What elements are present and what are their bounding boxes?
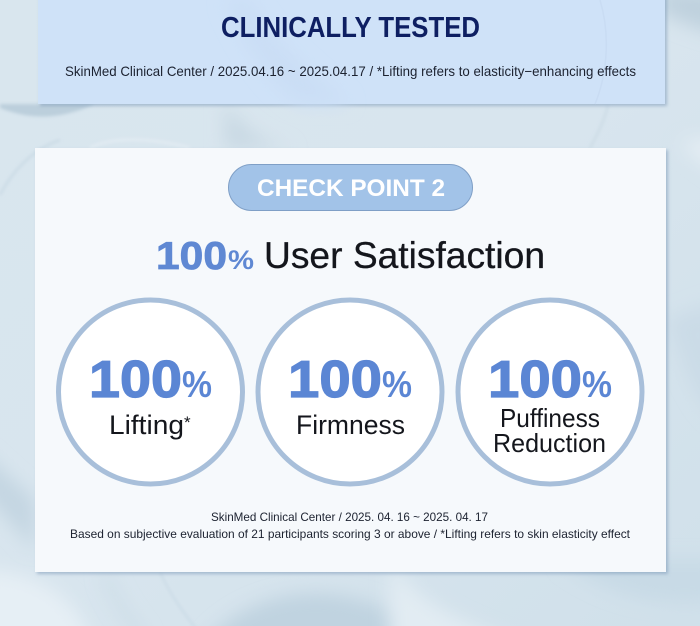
badge: check point 2 xyxy=(228,164,472,210)
badge: check point 2: CHECK POINT 2 xyxy=(257,175,445,202)
stat circle: lifting xyxy=(58,300,242,484)
stat circle: puffiness reduction: % xyxy=(582,364,612,405)
stat circle: firmness: Firmness xyxy=(296,410,405,440)
stat circle: puffiness reduction xyxy=(458,300,642,484)
heading: 100% user satisfaction: 100 xyxy=(156,235,227,278)
heading: 100% user satisfaction xyxy=(156,235,545,278)
stat circle: lifting: % xyxy=(182,364,212,405)
stat circle: lifting: Lifting xyxy=(109,410,184,440)
stat circle: puffiness reduction: Reduction xyxy=(493,428,606,458)
heading: 100% user satisfaction: User Satisfaction xyxy=(264,235,545,276)
stat circle: firmness: % xyxy=(382,364,412,405)
stat circle: puffiness reduction: Puffiness xyxy=(500,403,600,433)
footnote: source and dates: SkinMed Clinical Center / 2025. 04. 16 ~ 2025. 04. 17 xyxy=(211,510,488,524)
heading: 100% user satisfaction: % xyxy=(228,245,254,275)
source note: clinical center and dates: SkinMed Clinical Center / 2025.04.16 ~ 2025.04.17 / *Lifting refers to elasticity−enhancing effects xyxy=(65,63,636,79)
stat circle: lifting: 100 xyxy=(89,351,182,409)
stat circle: firmness xyxy=(258,300,442,484)
heading: clinically tested: CLINICALLY TESTED xyxy=(221,12,480,44)
panel: check point 2 xyxy=(35,148,666,572)
stat circle: lifting: * xyxy=(184,413,191,432)
panel: clinically tested xyxy=(38,0,665,104)
stat circle: firmness: 100 xyxy=(288,351,382,409)
stat circle: puffiness reduction: 100 xyxy=(488,351,582,409)
footnote: evaluation method: Based on subjective evaluation of 21 participants scoring 3 or above / *Lifting refers to skin elasticity effect xyxy=(70,527,631,541)
